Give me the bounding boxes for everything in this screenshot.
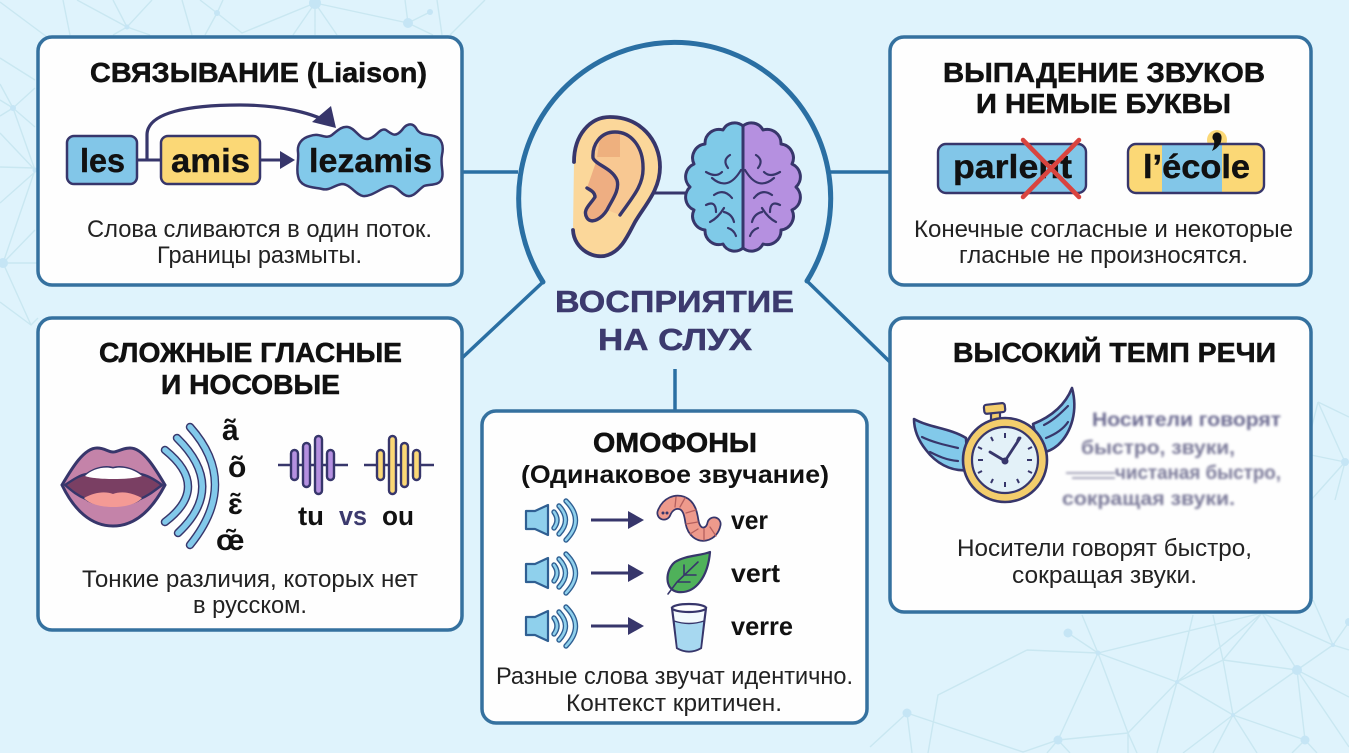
blurred fast speech text — [1062, 410, 1281, 510]
title — [555, 284, 794, 357]
text: vowels description: Тонкие различия, которых нет — [82, 566, 418, 593]
heading: silent letters: И НЕМЫЕ БУКВЫ — [976, 88, 1231, 119]
central hub arc — [519, 42, 831, 282]
text: homophones description — [496, 663, 853, 717]
word: l'ecole — [1128, 130, 1264, 193]
label: tu vs ou: tu — [298, 501, 324, 531]
row: vert — [526, 552, 780, 594]
icon: sound waves from mouth — [165, 427, 215, 545]
heading: silent letters — [943, 57, 1265, 119]
text: vowels description: в русском. — [193, 592, 307, 619]
heading: homophones: ОМОФОНЫ — [593, 427, 757, 458]
panel: vowels — [38, 318, 462, 630]
liaison diagram: les — [80, 142, 125, 179]
nasal vowel symbols: œ̃ — [216, 524, 244, 557]
text: speech tempo description: сокращая звуки. — [1012, 562, 1197, 589]
label: tu vs ou: ou — [382, 501, 414, 531]
blurred fast speech text: Носители говорят — [1092, 410, 1281, 431]
row: ver — [526, 497, 768, 540]
row: verre — [526, 604, 793, 652]
heading: speech tempo: ВЫСОКИЙ ТЕМП РЕЧИ — [953, 336, 1276, 368]
title: НА СЛУХ — [598, 322, 752, 357]
blurred fast speech text: сокращая звуки. — [1062, 489, 1235, 510]
text: homophones description: Разные слова звучат идентично. — [496, 663, 853, 690]
heading: homophones: (Одинаковое звучание) — [521, 461, 829, 489]
waveform: ou — [364, 436, 434, 494]
text: silent letters description: Конечные согласные и некоторые — [914, 216, 1293, 243]
text: silent letters description — [914, 216, 1293, 269]
nasal vowel symbols: ɛ̃ — [228, 488, 243, 521]
word: l'ecole: l’école — [1143, 148, 1250, 185]
row: vert: vert — [731, 558, 780, 588]
liaison diagram: lezamis — [309, 142, 432, 179]
panel: silent letters — [890, 37, 1311, 285]
word: parlent crossed out — [938, 140, 1086, 197]
text: vowels description — [82, 566, 418, 619]
icon: winged stopwatch — [914, 388, 1074, 502]
panel: homophones — [482, 411, 867, 723]
heading: vowels — [99, 337, 402, 400]
nasal vowel symbols — [216, 414, 246, 557]
text: silent letters description: гласные не произносятся. — [959, 242, 1248, 269]
heading: vowels: СЛОЖНЫЕ ГЛАСНЫЕ — [99, 337, 402, 368]
label: tu vs ou: vs — [339, 501, 367, 531]
icon: worm — [662, 497, 716, 540]
icon: leaf — [667, 552, 710, 594]
panel: speech tempo — [890, 318, 1311, 612]
heading: vowels: И НОСОВЫЕ — [161, 369, 340, 400]
icon: glass of water — [672, 604, 706, 652]
blurred fast speech text: чистаная быстро, — [1115, 463, 1281, 484]
icon: brain — [686, 123, 800, 251]
word: parlent crossed out: parlent — [953, 148, 1072, 185]
title: ВОСПРИЯТИЕ — [555, 284, 794, 319]
text: speech tempo description — [957, 535, 1252, 589]
icon: ear — [573, 117, 660, 256]
heading: liaison: СВЯЗЫВАНИЕ (Liaison) — [90, 57, 427, 88]
heading: silent letters: ВЫПАДЕНИЕ ЗВУКОВ — [943, 57, 1265, 88]
waveform: tu — [278, 436, 348, 494]
liaison diagram — [67, 105, 443, 196]
text: liaison description — [87, 216, 432, 269]
text: liaison description: Границы размыты. — [157, 242, 362, 269]
text: speech tempo description: Носители говорят быстро, — [957, 535, 1252, 562]
liaison diagram: amis — [171, 142, 250, 179]
nasal vowel symbols: ã — [222, 414, 239, 447]
row: verre: verre — [731, 611, 793, 641]
text: homophones description: Контекст критичен. — [566, 690, 782, 717]
icon: ear to brain link — [654, 192, 690, 194]
label: tu vs ou — [298, 501, 414, 531]
blurred fast speech text: быстро, звуки, — [1081, 438, 1235, 459]
icon: lips — [62, 448, 165, 526]
panel: liaison — [38, 37, 462, 285]
heading: homophones — [521, 427, 829, 489]
connector lines — [462, 172, 890, 411]
row: ver: ver — [731, 505, 768, 535]
nasal vowel symbols: õ — [228, 451, 246, 484]
text: liaison description: Слова сливаются в один поток. — [87, 216, 432, 243]
